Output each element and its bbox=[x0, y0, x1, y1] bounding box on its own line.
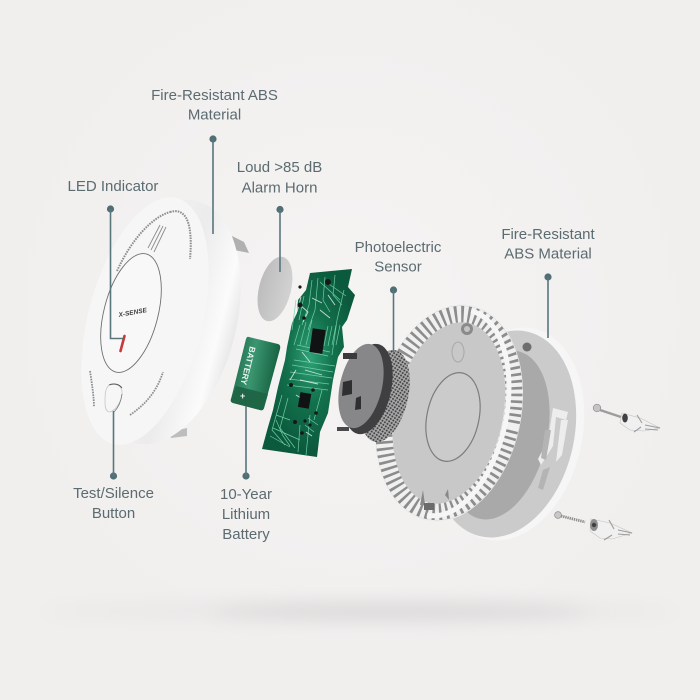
center recess bbox=[418, 368, 488, 466]
label: test/silence button: Test/Silence bbox=[73, 485, 154, 502]
test button bbox=[105, 384, 122, 412]
leader: battery bbox=[242, 406, 250, 480]
label: alarm horn bbox=[237, 159, 322, 196]
recessed center bbox=[433, 340, 565, 530]
battery bbox=[231, 337, 280, 410]
label: fire-resistant ABS material (front): Material bbox=[188, 106, 241, 124]
mounting tabs bbox=[170, 236, 249, 438]
leader: LED bbox=[107, 205, 123, 338]
label: alarm horn: Loud >85 dB bbox=[237, 159, 322, 176]
label: fire-resistant ABS material (back): Fire-Resistant bbox=[501, 226, 596, 243]
label: lithium battery: Lithium bbox=[222, 506, 270, 523]
label: photoelectric sensor bbox=[355, 239, 442, 276]
back plate bbox=[412, 313, 604, 555]
alarm horn disc bbox=[251, 253, 299, 325]
circuit board bbox=[262, 269, 355, 457]
leader: back plate bbox=[544, 273, 552, 338]
sensor housing bbox=[335, 339, 401, 439]
wall anchor screw bottom bbox=[555, 512, 632, 540]
bracket cut-outs bbox=[538, 408, 568, 465]
label: fire-resistant ABS material (front) bbox=[151, 87, 278, 124]
vent slots bbox=[367, 302, 531, 524]
label: fire-resistant ABS material (back) bbox=[501, 226, 596, 262]
sound vents bbox=[148, 225, 166, 252]
circuit traces bbox=[270, 275, 346, 455]
label: lithium battery bbox=[220, 486, 272, 543]
chamber floor bbox=[377, 312, 521, 514]
leader: sensor bbox=[390, 286, 397, 352]
smoke alarm front cover bbox=[58, 183, 265, 461]
label: test/silence button: Button bbox=[92, 505, 135, 522]
photoelectric sensor bbox=[331, 339, 418, 447]
leader: test button bbox=[110, 411, 117, 480]
mounting post bbox=[461, 323, 473, 335]
center button circle bbox=[90, 247, 172, 379]
sensor face bbox=[331, 339, 391, 433]
label: alarm horn: Alarm Horn bbox=[242, 180, 317, 196]
label: lithium battery: 10-Year bbox=[220, 486, 272, 503]
battery: + bbox=[240, 391, 245, 401]
sensor mesh bbox=[352, 345, 418, 447]
battery: BATTERY bbox=[238, 346, 258, 386]
leader: alarm horn bbox=[276, 206, 284, 272]
label: lithium battery: Battery bbox=[222, 526, 270, 543]
LED indicator bbox=[120, 336, 124, 351]
chips bbox=[309, 328, 326, 354]
ring rim bbox=[427, 311, 509, 516]
label: LED indicator: LED Indicator bbox=[68, 178, 158, 195]
vented chamber ring bbox=[356, 290, 542, 536]
alarm body bbox=[67, 183, 265, 461]
alarm front face bbox=[58, 184, 232, 458]
label: test/silence button bbox=[73, 485, 154, 522]
printed text band bbox=[90, 211, 191, 415]
leader: front cover bbox=[209, 135, 217, 234]
label: photoelectric sensor: Sensor bbox=[374, 258, 422, 276]
logo: X-SENSE bbox=[117, 307, 148, 319]
label: fire-resistant ABS material (back): ABS Material bbox=[504, 246, 592, 262]
label: photoelectric sensor: Photoelectric bbox=[355, 239, 442, 256]
label: fire-resistant ABS material (front): Fire-Resistant ABS bbox=[151, 87, 278, 104]
wall anchor screw top bbox=[593, 404, 660, 432]
floor shadow bbox=[40, 602, 680, 620]
